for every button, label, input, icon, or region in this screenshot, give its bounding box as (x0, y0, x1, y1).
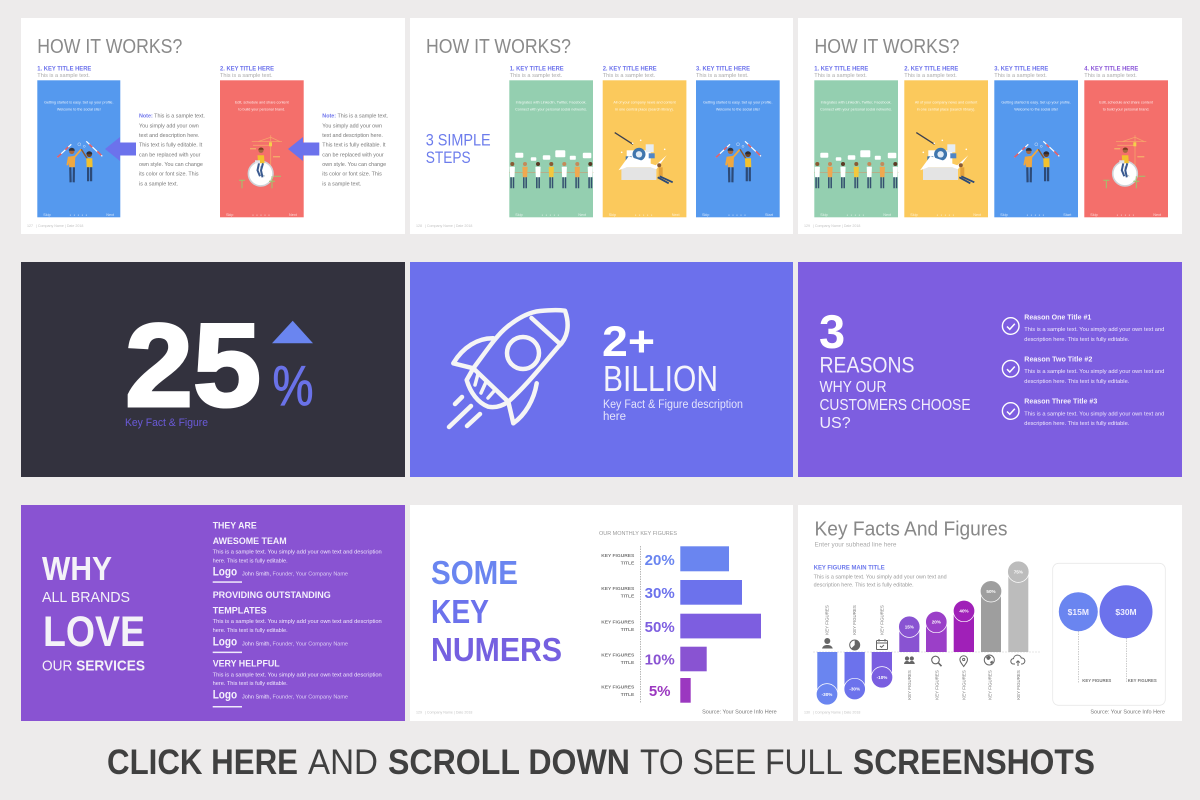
icon: location pin (960, 656, 968, 666)
chart: positive and negative bars: -30% (849, 687, 860, 692)
card: blue step 1: Skip (43, 213, 51, 217)
step 2 title: 2. KEY TITLE HERE (603, 65, 657, 72)
headline billion: BILLION (603, 358, 718, 399)
panel: revenue bubbles: $15M (1068, 607, 1089, 617)
reason 3: Reason Three Title #3 (1024, 397, 1097, 406)
card: red step 2: Skip (226, 213, 233, 217)
heading: Key Facts And Figures (814, 518, 1008, 540)
icon: cloud upload (1011, 655, 1025, 666)
headline: SOME (431, 554, 518, 591)
card: blue step 1: Welcome to the social site! (57, 107, 101, 111)
heading: 3 simple steps (426, 132, 491, 167)
testimonial 2: John Smith, Founder, Your Company Name (242, 641, 348, 647)
arrow: pointing to step 2 (288, 137, 319, 161)
call to action banner: TO SEE FULL (640, 743, 843, 782)
note text 1 (139, 114, 205, 187)
bar chart: monthly key figures: 30% (645, 585, 675, 602)
call to action banner (107, 743, 1095, 782)
card: green step 1 (509, 80, 593, 217)
step 2 title: This is a sample text. (904, 73, 957, 79)
step 3 title: This is a sample text. (696, 73, 749, 79)
headline: NUMERS (431, 631, 562, 668)
testimonial 3: Logo (213, 690, 237, 702)
footer: 129 | Company Name | Date 2018 (416, 711, 472, 715)
description: Key Fact & Figure description (603, 399, 743, 411)
big number 25: 25 (125, 300, 261, 432)
card: red step 4: Edit, schedule and share content (1099, 100, 1153, 104)
testimonial 1 (213, 521, 382, 583)
panel: how it works, three steps (410, 18, 793, 234)
panel: revenue bubbles (1053, 563, 1165, 705)
note text 1: This text is fully editable. It (139, 143, 203, 149)
bar chart: monthly key figures: TITLE (621, 660, 635, 666)
panel: key facts and figures (798, 505, 1182, 721)
card: blue step 3: Getting started is easy. Set up your profile. (1001, 100, 1071, 104)
headline: ALL BRANDS (42, 589, 130, 606)
panel: some key numbers (410, 505, 793, 721)
step 4 title (1084, 65, 1139, 79)
bar chart: monthly key figures (601, 546, 761, 703)
step 1 title (510, 65, 564, 79)
headline: KEY (431, 593, 489, 630)
card: yellow step 2: in one central place (search library). (615, 107, 674, 111)
headline: LOVE (43, 608, 145, 656)
chart: positive and negative bars: KEY FIGURES (907, 670, 912, 700)
chart: positive and negative bars (813, 561, 1041, 705)
source: Source: Your Source Info Here (702, 710, 777, 716)
card: yellow step 2: Skip (609, 213, 616, 217)
chart title: OUR MONTHLY KEY FIGURES (599, 531, 678, 537)
arrow: pointing to step 1 (105, 137, 136, 161)
reason 2 (1002, 355, 1164, 385)
panel: revenue bubbles: KEY FIGURES (1128, 678, 1157, 684)
card: blue step 3: Welcome to the social site! (716, 107, 760, 111)
card: green step 1: Next (578, 213, 587, 217)
card: yellow step 2 (904, 80, 988, 217)
footer: 129 | Company Name | Date 2018 (804, 224, 860, 228)
note text 1: Note: This is a sample text. (139, 114, 205, 120)
step 3 title: 3. KEY TITLE HERE (994, 65, 1049, 72)
icon: globe (984, 655, 994, 665)
chart: positive and negative bars: 50% (986, 589, 996, 594)
note text 2: is a sample text. (322, 181, 361, 187)
step 1 title: This is a sample text. (510, 73, 563, 79)
chart: positive and negative bars: -10% (877, 675, 887, 680)
step 1 title (37, 65, 92, 79)
bar chart: monthly key figures: 10% (645, 652, 675, 669)
reason 1: Reason One Title #1 (1024, 313, 1091, 322)
headline 3 reasons: WHY OUR (820, 379, 886, 396)
card: blue step 3: Skip (1000, 213, 1008, 217)
bar chart: monthly key figures: 5% (649, 683, 671, 700)
card: yellow step 2 (603, 80, 686, 217)
step 1 title: 1. KEY TITLE HERE (814, 65, 869, 72)
card: red step 4 (1084, 80, 1168, 217)
key figure description: KEY FIGURE MAIN TITLE (814, 564, 885, 571)
chart: positive and negative bars: KEY FIGURES (961, 670, 966, 700)
step 4 title: This is a sample text. (1084, 73, 1137, 79)
card: yellow step 2: Skip (910, 213, 918, 217)
headline 3 reasons (819, 305, 970, 432)
testimonial 3: VERY HELPFUL (213, 658, 280, 669)
step 3 title (696, 65, 751, 79)
card: green step 1: Integrates with LinkedIn, Twitter, Facebook. (516, 100, 587, 104)
headline 3 reasons: CUSTOMERS CHOOSE (820, 397, 970, 414)
testimonial 3: here. This text is fully editable. (213, 681, 288, 687)
bar chart: monthly key figures: KEY FIGURES (601, 653, 635, 659)
icon: pie chart (850, 640, 860, 650)
key figure description: description here. This text is fully editable. (814, 583, 914, 589)
icon: magnifier (932, 656, 942, 666)
bar chart: monthly key figures: TITLE (621, 593, 635, 599)
headline 2+: 2+ (602, 318, 655, 366)
testimonial 1: here. This text is fully editable. (213, 559, 288, 565)
step 1 title: This is a sample text. (814, 73, 867, 79)
subheading: Enter your subhead line here (814, 542, 897, 549)
key figure description (814, 564, 947, 589)
panel: revenue bubbles: $30M (1115, 607, 1137, 617)
testimonial 2 (213, 590, 382, 653)
icon: calendar (876, 639, 888, 650)
step 3 title (994, 65, 1049, 79)
description (603, 399, 743, 423)
note text 1: text and description here. (139, 133, 200, 139)
testimonial 3: This is a sample text. You simply add your own text and description (213, 672, 382, 678)
step 2 title: This is a sample text. (603, 73, 656, 79)
step 2 title (220, 65, 275, 79)
testimonial 3 (213, 658, 382, 708)
reason 1: This is a sample text. You simply add your own text and (1024, 327, 1164, 333)
card: green step 1: Skip (515, 213, 523, 217)
icon: rocket (449, 310, 568, 427)
heading: how it works: HOW IT WORKS? (814, 36, 960, 58)
step 3 title: 3. KEY TITLE HERE (696, 65, 751, 72)
step 2 title: 2. KEY TITLE HERE (220, 65, 275, 72)
card: green step 1 (814, 80, 898, 217)
note text 2: text and description here. (322, 133, 383, 139)
card: blue step 3 (994, 80, 1078, 217)
card: red step 2: to build your personal brand. (238, 107, 285, 111)
bar chart: monthly key figures: TITLE (621, 692, 635, 698)
card: green step 1: Integrates with LinkedIn, Twitter, Facebook. (821, 100, 892, 104)
bar chart: monthly key figures: TITLE (621, 627, 635, 633)
testimonial 2: TEMPLATES (213, 605, 267, 616)
key figure description: This is a sample text. You simply add your own text and (814, 574, 947, 580)
description: here (603, 411, 626, 423)
call to action banner: SCREENSHOTS (853, 743, 1095, 782)
reason 2: This is a sample text. You simply add your own text and (1024, 369, 1164, 375)
step 1 title (814, 65, 869, 79)
chart: positive and negative bars: KEY FIGURES (880, 605, 884, 635)
note text 2 (322, 114, 388, 187)
panel: 3 reasons (798, 262, 1182, 477)
card: green step 1: Next (883, 213, 892, 217)
note text 2: This text is fully editable. It (322, 143, 386, 149)
testimonial 2: here. This text is fully editable. (213, 628, 288, 634)
card: red step 2: Edit, schedule and share content (235, 100, 289, 104)
step 2 title (904, 65, 959, 79)
chart: positive and negative bars: 15% (905, 624, 914, 629)
step 4 title: 4. KEY TITLE HERE (1084, 65, 1139, 72)
note text 1: own style. You can change (139, 162, 203, 168)
step 1 title: 1. KEY TITLE HERE (37, 65, 92, 72)
footer: 130 | Company Name | Date 2018 (804, 711, 860, 715)
panel: how it works, four steps (798, 18, 1182, 234)
heading: 3 simple steps: STEPS (426, 149, 471, 167)
icon: people (904, 656, 915, 664)
chart: positive and negative bars: 20% (932, 620, 941, 625)
bar chart: monthly key figures: KEY FIGURES (601, 553, 635, 559)
card: green step 1: Skip (820, 213, 828, 217)
step 2 title: 2. KEY TITLE HERE (904, 65, 959, 72)
card: red step 4: Next (1153, 213, 1162, 217)
reason 3: description here. This text is fully editable. (1024, 421, 1129, 427)
card: yellow step 2: Next (672, 213, 680, 217)
headline 3 reasons: REASONS (820, 353, 914, 378)
headline 3 reasons: 3 (819, 305, 845, 358)
panel: revenue bubbles: KEY FIGURES (1082, 678, 1112, 684)
bar chart: monthly key figures: KEY FIGURES (601, 586, 635, 592)
card: blue step 3: Start (765, 213, 774, 217)
headline 3 reasons: US? (820, 415, 851, 432)
call to action banner: SCROLL DOWN (388, 743, 630, 782)
caption: Key Fact & Figure (125, 417, 208, 429)
heading: 3 simple steps: 3 SIMPLE (426, 132, 491, 150)
card: blue step 3: Getting started is easy. Set up your profile. (703, 100, 773, 104)
testimonial 1: This is a sample text. You simply add your own text and description (213, 550, 382, 556)
card: yellow step 2: All of your company news and content (613, 100, 676, 104)
panel: 25 percent key fact (21, 262, 405, 477)
card: yellow step 2: Next (973, 213, 982, 217)
bar chart: monthly key figures: KEY FIGURES (601, 620, 635, 626)
chart: positive and negative bars: KEY FIGURES (987, 670, 992, 700)
heading: how it works: HOW IT WORKS? (426, 36, 571, 58)
testimonial 2: PROVIDING OUTSTANDING (213, 590, 331, 601)
testimonial 1: THEY ARE (213, 521, 257, 532)
call to action banner: AND (308, 743, 378, 782)
percent sign: % (272, 354, 314, 418)
headline (431, 554, 562, 668)
note text 1: You simply add your own (139, 123, 199, 129)
card: blue step 3 (696, 80, 780, 217)
bar chart: monthly key figures: 50% (645, 619, 675, 636)
step 3 title: This is a sample text. (994, 73, 1047, 79)
reason 1 (1002, 313, 1164, 343)
note text 2: can be replaced with your (322, 152, 384, 158)
note text 2: its color or font size. This (322, 172, 382, 178)
card: blue step 1: Getting started is easy. Set up your profile. (44, 100, 114, 104)
card: green step 1: Connect with your personal social networks. (515, 107, 587, 111)
chart: positive and negative bars: KEY FIGURES (824, 605, 830, 635)
card: yellow step 2: in one central place (search library). (917, 107, 975, 111)
bar chart: monthly key figures: TITLE (621, 560, 635, 566)
icon: up triangle (272, 321, 313, 343)
chart: positive and negative bars: -30% (822, 692, 832, 697)
testimonial 1: John Smith, Founder, Your Company Name (242, 571, 348, 577)
reason 3 (1002, 397, 1164, 427)
heading: how it works: HOW IT WORKS? (37, 36, 182, 58)
panel: how it works, two steps (21, 18, 405, 234)
card: blue step 1: Next (106, 213, 115, 217)
footer: 128 | Company Name | Date 2018 (416, 224, 472, 228)
headline: OUR SERVICES (42, 658, 145, 675)
panel: 2+ billion key fact (410, 262, 793, 477)
card: green step 1: Connect with your personal social networks. (820, 107, 892, 111)
source: Source: Your Source Info Here (1090, 710, 1165, 716)
step 2 title (603, 65, 657, 79)
card: red step 4: Skip (1090, 213, 1098, 217)
note text 2: own style. You can change (322, 162, 386, 168)
chart: positive and negative bars: 75% (1014, 569, 1023, 574)
headline: WHY (42, 550, 112, 587)
chart: positive and negative bars: KEY FIGURES (1016, 670, 1021, 700)
headline (42, 550, 145, 675)
testimonial 3: John Smith, Founder, Your Company Name (242, 695, 348, 701)
card: blue step 3: Skip (702, 213, 709, 217)
note text 1: is a sample text. (139, 181, 178, 187)
bar chart: monthly key figures: KEY FIGURES (601, 684, 635, 690)
reason 2: description here. This text is fully editable. (1024, 379, 1129, 385)
card: red step 2: Next (289, 213, 298, 217)
testimonial 1: AWESOME TEAM (213, 536, 287, 547)
chart: positive and negative bars: 40% (959, 609, 969, 614)
reason 2: Reason Two Title #2 (1024, 355, 1092, 364)
icon: person (822, 638, 833, 648)
step 1 title: 1. KEY TITLE HERE (510, 65, 564, 72)
card: blue step 3: Start (1063, 213, 1072, 217)
card: blue step 3: Welcome to the social site! (1014, 107, 1058, 111)
chart: positive and negative bars: KEY FIGURES (934, 670, 939, 700)
card: red step 4: to build your personal brand. (1103, 107, 1149, 111)
testimonial 2: Logo (213, 637, 237, 649)
step 2 title: This is a sample text. (220, 73, 273, 79)
chart: positive and negative bars: KEY FIGURES (852, 605, 857, 635)
card: yellow step 2: All of your company news and content (915, 100, 977, 104)
reason 1: description here. This text is fully editable. (1024, 337, 1129, 343)
note text 2: You simply add your own (322, 123, 382, 129)
card: blue step 1 (37, 80, 120, 217)
testimonial 2: This is a sample text. You simply add your own text and description (213, 619, 382, 625)
call to action banner: CLICK HERE (107, 743, 298, 782)
note text 2: Note: This is a sample text. (322, 114, 388, 120)
note text 1: its color or font size. This (139, 172, 199, 178)
testimonial 1: Logo (213, 567, 237, 579)
step 1 title: This is a sample text. (37, 73, 90, 79)
bar chart: monthly key figures: 20% (645, 552, 675, 569)
note text 1: can be replaced with your (139, 152, 201, 158)
footer: 127 | Company Name | Date 2018 (27, 224, 83, 228)
reason 3: This is a sample text. You simply add your own text and (1024, 411, 1164, 417)
panel: why all brands love (21, 505, 405, 721)
card: red step 2 (220, 80, 304, 217)
